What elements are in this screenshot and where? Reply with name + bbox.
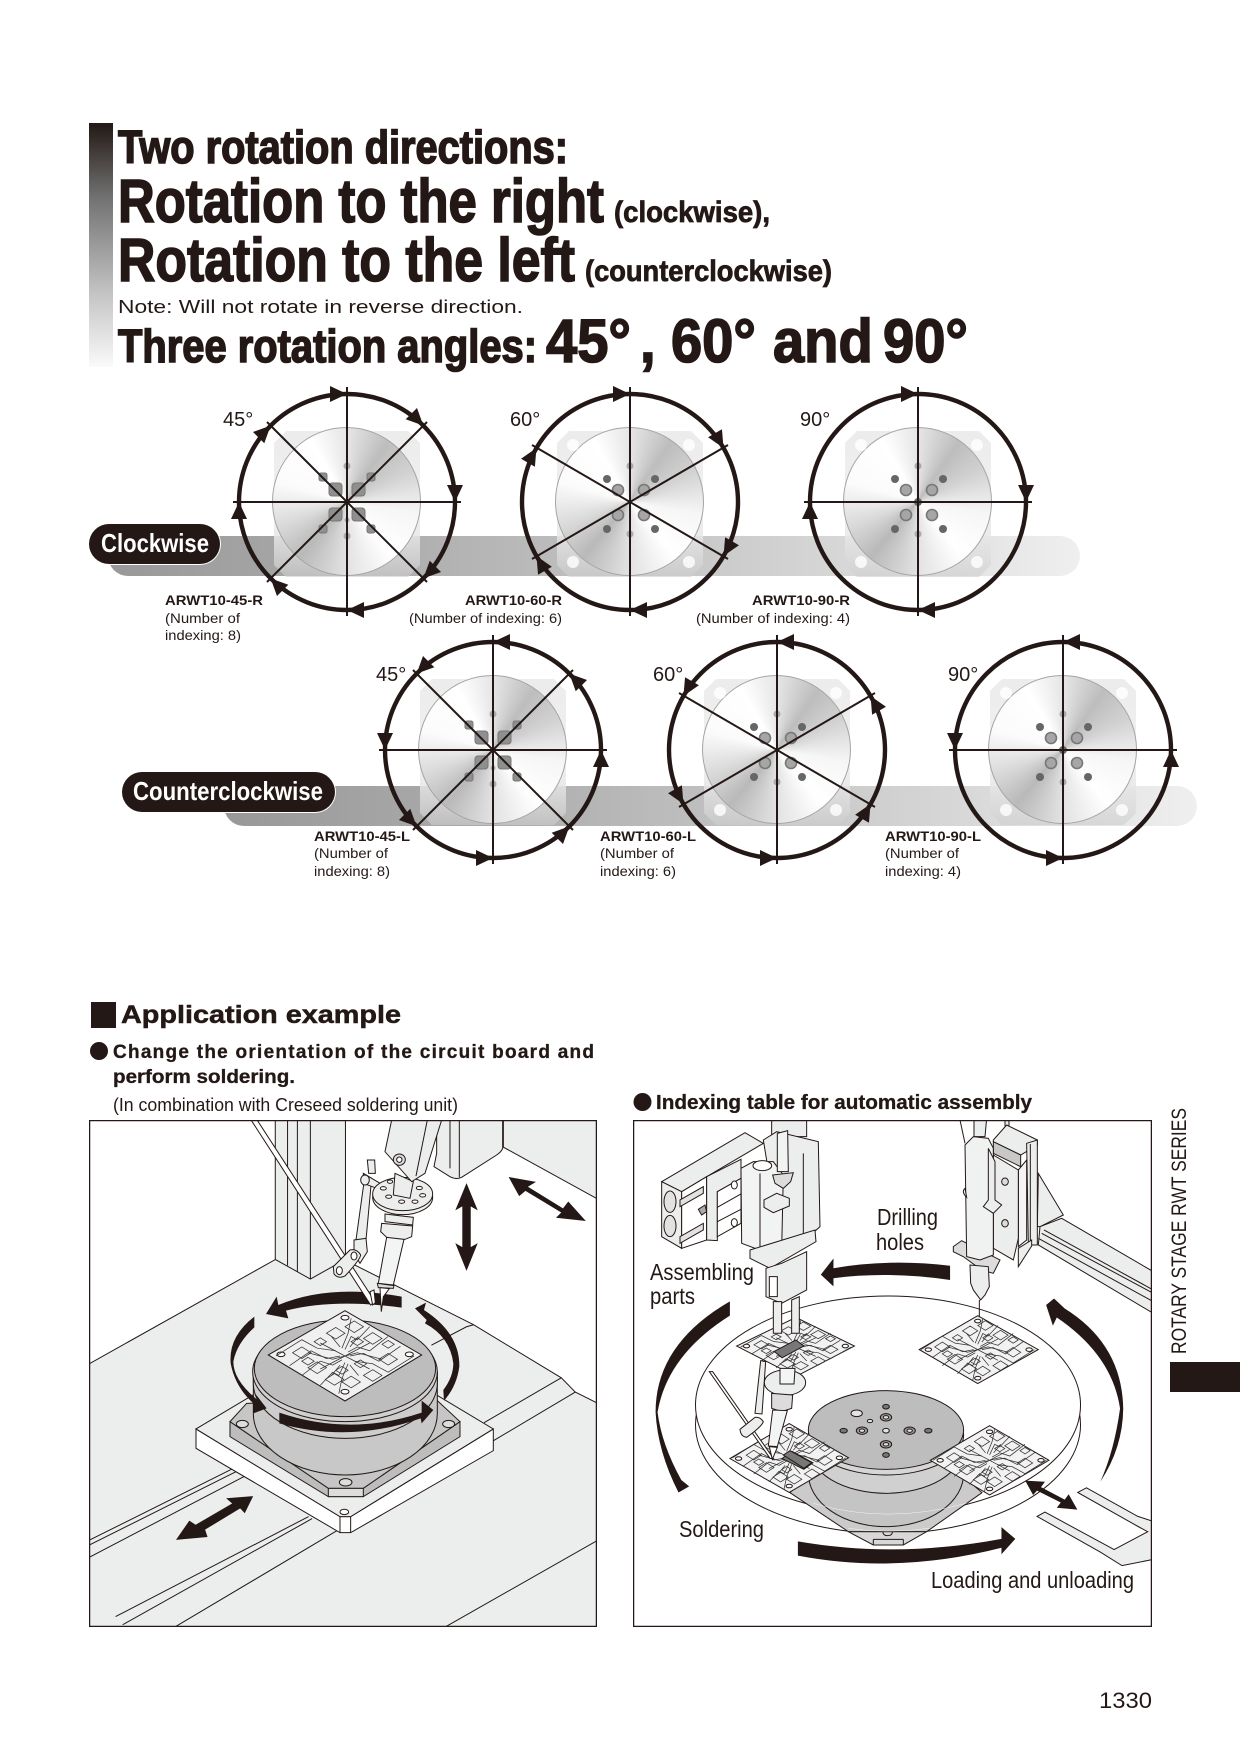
motion arrow: vertical <box>455 1183 478 1271</box>
label: drilling holes <box>876 1204 938 1255</box>
caption ARWT10-45-L: indexing: 8) <box>314 863 390 879</box>
heading text: Indexing table for automatic assembly <box>656 1092 1033 1114</box>
caption ARWT10-60-L: indexing: 6) <box>600 863 676 879</box>
rotation arrow: right <box>415 1303 459 1401</box>
soldering tool <box>709 1361 812 1468</box>
caption ARWT10-45-R: (Number of <box>165 610 240 626</box>
dial: counterclockwise 90: 90° <box>948 664 978 686</box>
heading text: Application example <box>121 1001 401 1029</box>
page number: 1330 <box>1099 1688 1152 1713</box>
caption ARWT10-90-L: (Number of <box>885 845 959 861</box>
dial: counterclockwise 60: 60° <box>653 664 683 686</box>
label: assembling parts: parts <box>650 1283 695 1309</box>
assembling unit <box>662 1118 820 1333</box>
caption ARWT10-60-R: (Number of indexing: 6) <box>409 610 562 626</box>
heading: rotation to the right: Rotation to the right <box>118 167 604 235</box>
loader fork <box>1037 1488 1158 1566</box>
counterclockwise pill <box>122 772 335 812</box>
model captions clockwise row <box>165 592 850 643</box>
label: drilling holes: holes <box>876 1229 924 1255</box>
bullet <box>634 1093 652 1111</box>
drilling unit <box>953 1118 1153 1317</box>
caption ARWT10-60-L: ARWT10-60-L <box>600 828 696 844</box>
heading: angle values: 60° <box>671 308 756 376</box>
caption ARWT10-60-R: ARWT10-60-R <box>465 592 562 608</box>
side label: ROTARY STAGE RWT SERIES <box>1168 1108 1191 1354</box>
turntable <box>696 1296 1081 1545</box>
dial: counterclockwise 90 <box>947 634 1179 866</box>
dial: clockwise 45 <box>223 386 463 618</box>
dial: counterclockwise 45 <box>376 634 609 866</box>
process arrow: loading to drilling <box>1046 1299 1123 1482</box>
caption ARWT10-45-R <box>165 592 263 643</box>
caption ARWT10-45-R: indexing: 8) <box>165 627 241 643</box>
clockwise pill <box>89 524 220 564</box>
heading: three rotation angles: Three rotation angles: <box>118 320 537 372</box>
rotation arrow: front <box>279 1401 433 1432</box>
heading: angle values: , <box>640 308 656 376</box>
label: soldering: Soldering <box>679 1516 764 1542</box>
caption ARWT10-45-L: ARWT10-45-L <box>314 828 410 844</box>
dial: counterclockwise 60 <box>653 634 888 866</box>
caption ARWT10-90-R: (Number of indexing: 4) <box>696 610 850 626</box>
caption ARWT10-60-L: (Number of <box>600 845 674 861</box>
caption ARWT10-90-L: indexing: 4) <box>885 863 961 879</box>
heading: clockwise: (clockwise), <box>614 196 770 229</box>
panel frame <box>90 1120 596 1626</box>
caption ARWT10-90-L <box>885 828 981 879</box>
circuit board: loading station <box>930 1426 1049 1495</box>
heading: angle values: and <box>773 308 873 376</box>
process arrow: assembling to soldering <box>656 1301 730 1492</box>
bullet <box>90 1042 108 1060</box>
label: assembling parts <box>650 1259 754 1309</box>
heading: angle values: 45° <box>546 308 631 376</box>
right example heading <box>634 1092 1033 1114</box>
clockwise band <box>108 536 1080 576</box>
caption ARWT10-90-R: ARWT10-90-R <box>752 592 850 608</box>
panel: soldering illustration <box>89 1120 597 1627</box>
counterclockwise band <box>224 786 1197 826</box>
panel: indexing table illustration <box>633 1120 1152 1627</box>
caption ARWT10-45-R: ARWT10-45-R <box>165 592 263 608</box>
left example description: Change the orientation of the circuit board and <box>113 1042 594 1063</box>
panel frame <box>634 1120 1152 1626</box>
caption ARWT10-90-L: ARWT10-90-L <box>885 828 981 844</box>
loading double arrow <box>1025 1481 1077 1510</box>
rotation arrow: left <box>230 1317 267 1413</box>
process arrow: soldering to loading <box>798 1527 1015 1563</box>
dial: clockwise 90 <box>800 386 1034 618</box>
dial: clockwise 90: 90° <box>800 409 830 431</box>
circuit board on stage <box>268 1311 422 1401</box>
heading: angle values: 90° <box>883 308 968 376</box>
circuit board: soldering station <box>730 1424 848 1492</box>
side tab <box>1170 1362 1240 1392</box>
caption ARWT10-45-L <box>314 828 410 879</box>
model captions counterclockwise row <box>314 828 981 879</box>
dial: counterclockwise 45: 45° <box>376 664 406 686</box>
rotary stage <box>196 1292 493 1533</box>
circuit board: drilling station <box>919 1316 1038 1384</box>
dial: clockwise 45: 45° <box>223 409 253 431</box>
title block <box>89 121 968 376</box>
caption ARWT10-45-L: (Number of <box>314 845 388 861</box>
heading square <box>91 1002 116 1028</box>
left example note: (In combination with Creseed soldering unit) <box>113 1095 458 1115</box>
gradient bar <box>89 123 113 367</box>
heading: counterclockwise: (counterclockwise) <box>585 255 832 288</box>
clockwise label: Clockwise <box>101 528 209 558</box>
caption ARWT10-60-L <box>600 828 696 879</box>
caption ARWT10-90-R <box>696 592 850 626</box>
circuit board: assembling station <box>737 1317 854 1376</box>
wall and floor, traced in zoom coordinates <box>88 1117 600 1631</box>
caption ARWT10-60-R <box>409 592 562 626</box>
soldering head <box>250 1117 503 1312</box>
motion arrow: lower left <box>176 1496 253 1540</box>
label: assembling parts: Assembling <box>650 1259 754 1285</box>
counterclockwise label: Counterclockwise <box>133 776 323 806</box>
heading: rotation to the left: Rotation to the left <box>118 226 575 294</box>
note: Note: Will not rotate in reverse direction. <box>118 296 523 317</box>
heading: two rotation directions: Two rotation directions: <box>118 121 568 173</box>
label: drilling holes: Drilling <box>877 1204 938 1230</box>
left example description <box>113 1042 594 1088</box>
process arrow: drilling to assembling <box>821 1259 950 1286</box>
dial: clockwise 60 <box>510 386 740 618</box>
dial: clockwise 60: 60° <box>510 409 540 431</box>
motion arrow: upper right <box>509 1177 586 1221</box>
left example description: perform soldering. <box>113 1067 295 1088</box>
rotation arrow: back <box>266 1292 402 1318</box>
section heading: application example <box>90 1001 594 1115</box>
